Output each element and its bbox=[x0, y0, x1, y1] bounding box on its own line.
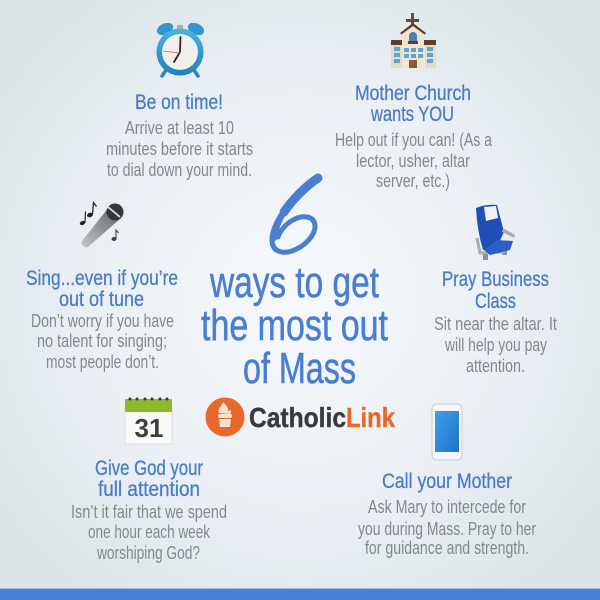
title text bbox=[201, 258, 388, 393]
text: pray business class body: Sit near the altar. It bbox=[434, 313, 557, 334]
icon: airline seat bbox=[476, 205, 515, 260]
text: pray business class body bbox=[434, 313, 557, 376]
text: sing body: no talent for singing; bbox=[37, 330, 167, 351]
text: give god body bbox=[71, 501, 227, 563]
icon: calendar: 31 bbox=[135, 413, 163, 443]
heading: be on time: Be on time! bbox=[135, 90, 223, 114]
heading: give god your full attention: full attention bbox=[98, 477, 200, 501]
text: sing body: Don’t worry if you have bbox=[31, 310, 174, 331]
icon: calendar bbox=[125, 398, 172, 444]
logo: CatholicLink bbox=[206, 398, 395, 436]
icon: smartphone bbox=[432, 404, 462, 460]
title text: the most out bbox=[201, 301, 388, 350]
logo: CatholicLink: Catholic bbox=[249, 402, 346, 433]
panel: sing bbox=[26, 202, 178, 372]
icon: microphone bbox=[79, 202, 124, 247]
heading: sing even if out of tune bbox=[26, 266, 178, 311]
heading: pray business class: Class bbox=[475, 289, 516, 313]
icon: church bbox=[391, 13, 436, 68]
title text: ways to get bbox=[209, 258, 379, 307]
text: be on time body bbox=[106, 117, 253, 180]
heading: pray business class: Pray Business bbox=[442, 267, 549, 291]
heading: give god your full attention: Give God your bbox=[95, 456, 203, 480]
numeral 6 bbox=[272, 177, 318, 252]
heading: sing even if out of tune: Sing...even if you’re bbox=[26, 266, 178, 290]
text: pray business class body: attention. bbox=[466, 355, 525, 376]
text: give god body: worshiping God? bbox=[96, 542, 200, 563]
icon: alarm clock bbox=[155, 20, 206, 76]
panel: mother church bbox=[335, 13, 493, 191]
heading: mother church wants you: wants YOU bbox=[370, 102, 454, 126]
text: give god body: one hour each week bbox=[88, 521, 211, 542]
text: mother church body: Help out if you can! (As a bbox=[335, 129, 493, 150]
text: call your mother body bbox=[358, 496, 536, 558]
text: be on time body: minutes before it starts bbox=[106, 138, 253, 159]
panel: pray business class bbox=[434, 205, 557, 376]
text: mother church body bbox=[335, 129, 493, 191]
text: sing body bbox=[31, 310, 174, 372]
text: mother church body: server, etc.) bbox=[376, 170, 450, 191]
text: be on time body: Arrive at least 10 bbox=[125, 117, 234, 138]
text: be on time body: to dial down your mind. bbox=[107, 159, 252, 180]
footer bar bbox=[0, 588, 600, 600]
text: pray business class body: will help you pay bbox=[444, 334, 548, 355]
heading: mother church wants you bbox=[355, 81, 471, 126]
text: give god body: Isn’t it fair that we spend bbox=[71, 501, 227, 522]
heading: pray business class bbox=[442, 267, 549, 313]
panel: give god your full attention bbox=[71, 398, 227, 563]
panel: call your mother bbox=[358, 404, 536, 558]
text: mother church body: lector, usher, altar bbox=[356, 150, 470, 171]
text: call your mother body: Ask Mary to intercede for bbox=[368, 496, 526, 517]
heading: mother church wants you: Mother Church bbox=[355, 81, 471, 105]
main title block bbox=[201, 177, 395, 436]
text: call your mother body: for guidance and strength. bbox=[365, 537, 529, 558]
heading: call your mother: Call your Mother bbox=[382, 469, 512, 493]
logo: CatholicLink: Link bbox=[346, 402, 395, 433]
panel: be on time bbox=[106, 20, 253, 180]
heading: give god your full attention bbox=[95, 456, 203, 501]
text: call your mother body: you during Mass. Pray to her bbox=[358, 518, 536, 539]
heading: sing even if out of tune: out of tune bbox=[59, 287, 144, 311]
text: sing body: most people don’t. bbox=[46, 351, 159, 372]
title text: of Mass bbox=[243, 344, 356, 393]
